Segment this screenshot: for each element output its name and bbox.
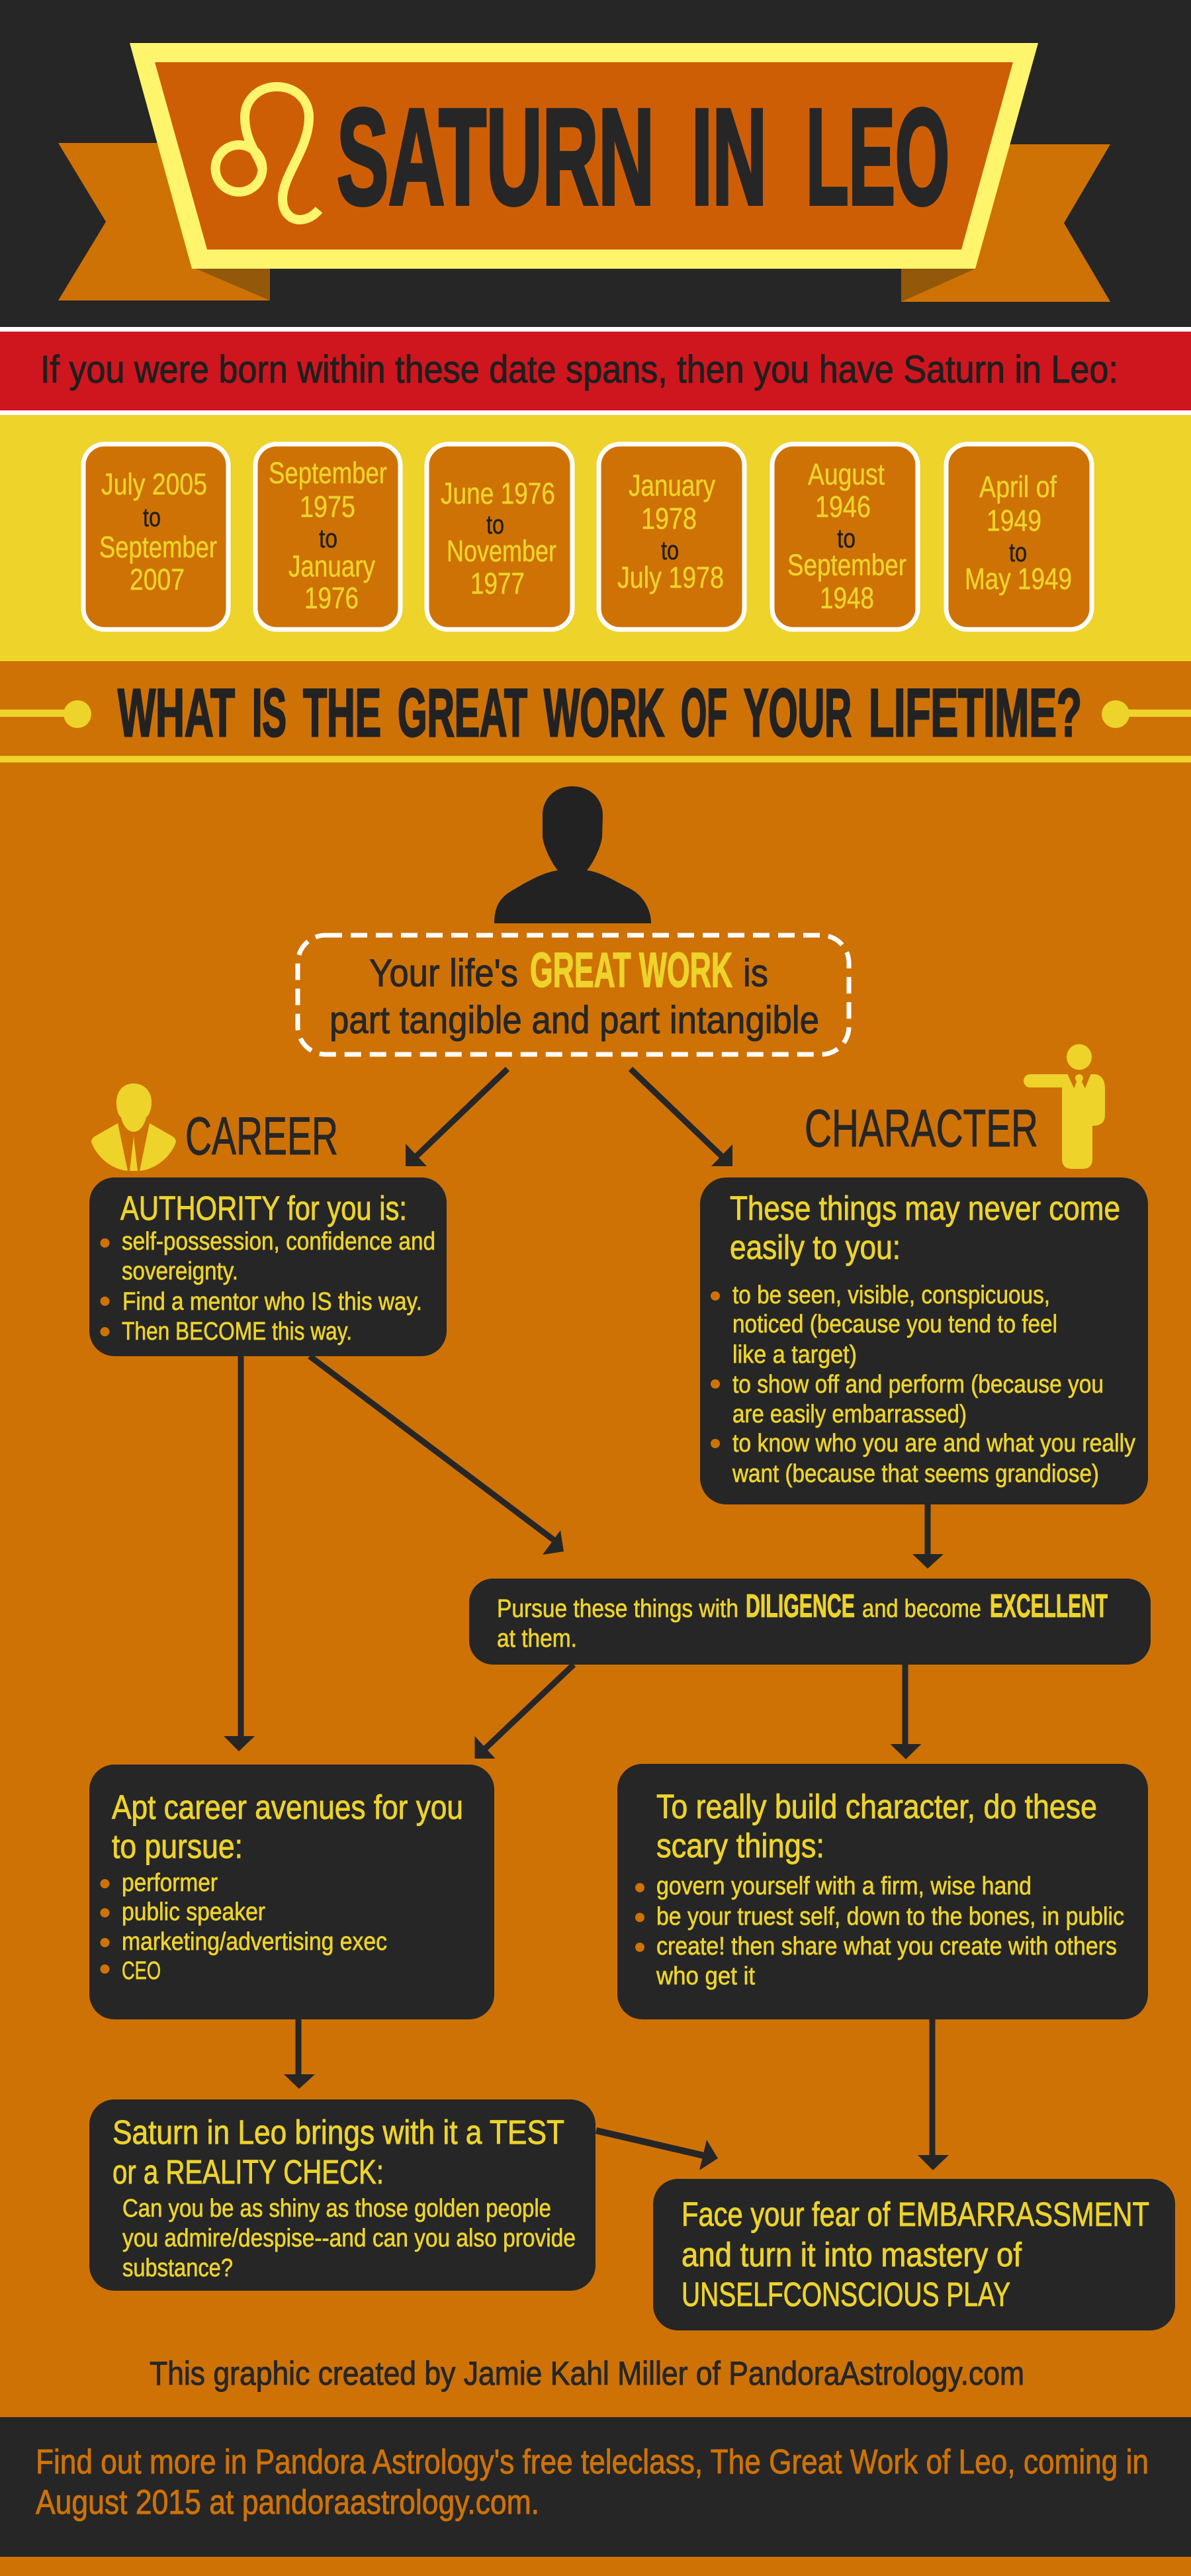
callout: great work: part tangible and part intangible (330, 999, 819, 1042)
panel: authority: AUTHORITY for you is: (120, 1189, 407, 1227)
panel: authority: self-possession, confidence and (122, 1228, 435, 1256)
heading: career: CAREER (185, 1107, 338, 1166)
icon: leo glyph (216, 87, 319, 220)
date card 3: 1977 (470, 567, 525, 600)
date card 6: May 1949 (965, 562, 1072, 596)
date card 4 (599, 444, 744, 629)
ribbon: left tail (58, 143, 270, 300)
panel: reality check: you admire/despise--and can you also provide (122, 2225, 576, 2252)
panel: may never come easily: to be seen, visible, conspicuous, (732, 1281, 1050, 1309)
panel: reality check: or a REALITY CHECK: (112, 2153, 384, 2191)
banner (130, 43, 1038, 269)
date card 1: July 2005 (101, 467, 207, 501)
panel: diligence: and become (862, 1595, 981, 1623)
date card 6: 1949 (987, 504, 1041, 537)
panel: may never come easily: like a target) (732, 1341, 857, 1369)
date card 2: January (288, 549, 375, 583)
panel: career avenues (89, 1765, 494, 2019)
panel: career avenues: to pursue: (112, 1827, 243, 1865)
panel: may never come easily: to know who you are and what you really (732, 1430, 1135, 1457)
panel: diligence: Pursue these things with (497, 1595, 738, 1623)
panel: career avenues: public speaker (122, 1898, 265, 1926)
section heading: OF (681, 675, 727, 751)
section heading: YOUR (744, 675, 852, 751)
date card 4: January (629, 469, 715, 502)
panel: face your fear: UNSELFCONSCIOUS PLAY (682, 2276, 1010, 2313)
section heading: GREAT (398, 675, 527, 751)
title: IN (691, 81, 767, 233)
arrow: avenues to test (284, 2019, 315, 2089)
date card 2: 1975 (300, 490, 355, 524)
date card 4: 1978 (641, 502, 697, 535)
panel: scary things: govern yourself with a firm, wise hand (656, 1872, 1032, 1900)
callout: great work: GREAT WORK (530, 943, 732, 997)
panel: may never come easily: are easily embarrassed) (732, 1401, 967, 1428)
footer band (0, 2417, 1191, 2557)
icon: pointing man (1024, 1044, 1105, 1169)
callout: great work: Your life's (369, 952, 518, 995)
panel: authority (89, 1177, 447, 1356)
panel: authority: Then BECOME this way. (122, 1318, 352, 1346)
panel: may never come easily: easily to you: (730, 1228, 901, 1266)
panel: reality check: Can you be as shiny as those golden people (122, 2195, 551, 2223)
section heading (0, 675, 1191, 762)
panel: scary things: create! then share what you create with others (656, 1933, 1117, 1960)
panel: face your fear: and turn it into mastery of (682, 2236, 1022, 2274)
date card 6: to (1009, 538, 1027, 567)
icon: career man (91, 1083, 176, 1171)
heading: character: CHARACTER (805, 1099, 1038, 1158)
panel: scary things: who get it (656, 1962, 755, 1990)
arrow: to character (631, 1069, 732, 1166)
panel: career avenues: marketing/advertising exec (122, 1928, 387, 1956)
panel: career avenues: Apt career avenues for you (112, 1788, 463, 1826)
arrow: scary things to embarrassment (918, 2019, 949, 2170)
date card 5: to (837, 524, 856, 553)
date card 2: to (319, 524, 337, 553)
icon: person silhouette (494, 786, 651, 923)
section heading: IS (252, 675, 287, 751)
panel: may never come easily: to show off and perform (because you (732, 1371, 1104, 1399)
section heading: WORK (544, 675, 664, 751)
panel: reality check (89, 2099, 596, 2291)
date card 4: to (661, 536, 679, 565)
date card 5: 1946 (815, 490, 871, 524)
date card 4: July 1978 (617, 561, 724, 594)
panel: scary things (617, 1764, 1148, 2019)
panel: date spans (0, 415, 1191, 661)
panel: may never come easily (700, 1177, 1148, 1504)
panel: reality check: substance? (122, 2254, 233, 2282)
panel: career avenues: performer (122, 1869, 218, 1897)
date card 3: November (447, 534, 556, 568)
arrow: diligence to avenues (475, 1665, 574, 1759)
credit line: This graphic created by Jamie Kahl Miller of PandoraAstrology.com (150, 2355, 1024, 2392)
footer band: August 2015 at pandoraastrology.com. (36, 2483, 539, 2522)
date card 1 (83, 444, 228, 629)
panel: career avenues: CEO (122, 1957, 161, 1985)
callout: great work (298, 935, 849, 1054)
title: SATURN (337, 81, 654, 233)
panel: may never come easily: want (because that seems grandiose) (732, 1460, 1099, 1488)
date card 3: June 1976 (441, 477, 555, 510)
header band (0, 0, 1191, 327)
panel: scary things: To really build character, do these (656, 1788, 1097, 1825)
date card 5: August (808, 457, 885, 491)
panel: authority: sovereignty. (122, 1258, 238, 1285)
arrow: test to embarrassment (596, 2131, 718, 2170)
date card 5 (772, 444, 918, 629)
section heading: WHAT (118, 675, 235, 751)
panel: diligence (469, 1579, 1151, 1665)
panel: authority: Find a mentor who IS this way. (122, 1288, 422, 1316)
date card 5: September (787, 548, 906, 582)
date card 1: to (143, 503, 161, 532)
panel: may never come easily: These things may never come (730, 1189, 1120, 1227)
panel: reality check: Saturn in Leo brings with it a TEST (112, 2113, 564, 2151)
date card 1: 2007 (130, 563, 185, 596)
panel: diligence: DILIGENCE (746, 1588, 855, 1624)
arrow: authority down to avenues (224, 1356, 255, 1751)
date card 2 (255, 444, 400, 629)
date card 3: to (486, 510, 504, 539)
title: LEO (806, 81, 949, 233)
panel: scary things: be your truest self, down to the bones, in public (656, 1903, 1124, 1931)
section heading: THE (303, 675, 381, 751)
date card 6: April of (979, 470, 1057, 504)
date card 2: 1976 (304, 581, 359, 615)
band: date span intro (0, 327, 1191, 415)
date card 5: 1948 (820, 581, 874, 615)
panel: diligence: EXCELLENT (990, 1588, 1108, 1624)
panel: may never come easily: noticed (because you tend to feel (732, 1311, 1057, 1338)
arrow: to career (406, 1069, 507, 1166)
panel: diligence: at them. (497, 1625, 577, 1653)
date card 2: September (269, 456, 387, 490)
date card 6 (946, 444, 1092, 629)
date card 3 (427, 444, 572, 629)
arrow: diligence to scary things (891, 1665, 921, 1759)
date card 1: September (99, 530, 217, 564)
ribbon: right tail (901, 144, 1110, 302)
arrow: authority to diligence (310, 1356, 564, 1555)
callout: great work: is (743, 952, 768, 995)
arrow: character to diligence (912, 1504, 944, 1569)
panel: face your fear (653, 2179, 1175, 2330)
panel: scary things: scary things: (656, 1827, 824, 1864)
